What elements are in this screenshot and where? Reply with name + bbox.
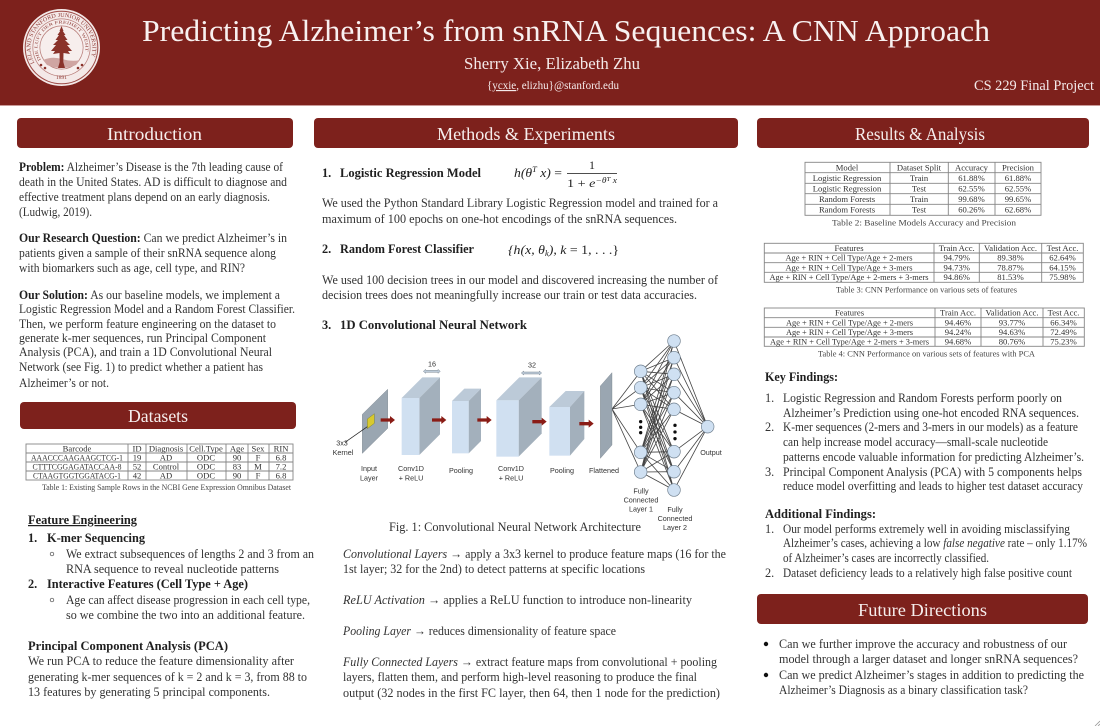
heading: methods: Methods & Experiments xyxy=(437,124,615,144)
text: PCA: We run PCA to reduce the feature dimensionality after xyxy=(28,654,294,668)
table 4: CNN performance with PCA: 66.34% xyxy=(1050,317,1077,327)
table 2: baseline models: 60.26% xyxy=(958,204,985,214)
text: PCA: Principal Component Analysis (PCA) xyxy=(28,639,228,653)
table 1: sample rows: AD xyxy=(160,452,172,462)
table 4: CNN performance with PCA: Features xyxy=(835,308,865,318)
heading: future directions xyxy=(757,594,1088,624)
table 4: CNN performance with PCA: 72.49% xyxy=(1050,327,1077,337)
text: key findings: Alzheimer’s Prediction using one-hot encoded RNA sequences. xyxy=(783,406,1079,420)
formula: random forest: = 1, . . .} xyxy=(570,242,619,257)
text: additional findings: Alzheimer’s cases, achieving a low false negative rate – only 1.17% xyxy=(783,536,1087,550)
table 4: CNN performance with PCA: 94.63% xyxy=(999,327,1025,337)
method 1: logistic regression: maximum of 100 epochs on one-hot encodings of the snRNA sequences. xyxy=(322,212,677,226)
heading: future directions: Future Directions xyxy=(858,600,987,620)
diagram labels: Conv1D xyxy=(398,464,424,473)
icon: Stanford seal xyxy=(23,9,100,86)
node: output xyxy=(701,420,714,433)
text: key findings: 2. xyxy=(765,420,774,434)
figure: CNN architecture diagram xyxy=(345,335,714,496)
heading: results: Results & Analysis xyxy=(855,124,985,144)
list: features: We extract subsequences of lengths 2 and 3 from an xyxy=(66,547,314,561)
heading: introduction xyxy=(17,118,293,148)
table 1: sample rows: 19 xyxy=(133,452,141,462)
table 4: CNN performance with PCA: 94.46% xyxy=(945,317,971,327)
arrows between layers xyxy=(381,416,594,428)
heading: methods xyxy=(314,118,738,148)
formula: logistic function: T xyxy=(606,177,611,183)
diagram labels: + ReLU xyxy=(399,474,423,482)
table 2: baseline models: Accuracy xyxy=(955,162,989,172)
table 2: baseline models: Train xyxy=(910,194,929,204)
table 1: sample rows: F xyxy=(256,452,261,462)
method 1: logistic regression: 1. xyxy=(322,166,331,180)
table 4: CNN performance with PCA: Age + RIN + Cell Type/Age + 2-mers + 3-mers xyxy=(770,336,930,346)
table 3: CNN performance: 64.15% xyxy=(1049,262,1076,272)
diagram labels: Pooling xyxy=(550,466,574,475)
table 4: CNN performance with PCA: 94.24% xyxy=(945,327,971,337)
formula: logistic function xyxy=(514,158,618,190)
method 2: random forest xyxy=(322,242,719,302)
table 1: sample rows: ODC xyxy=(197,452,215,462)
authors: Sherry Xie, Elizabeth Zhu xyxy=(464,54,640,73)
diagram labels: Conv1D xyxy=(498,464,524,473)
text: layer descriptions xyxy=(342,547,727,700)
layer width markers xyxy=(423,369,542,375)
panel: datasets xyxy=(20,402,314,699)
text: key findings: reduce model overfitting and leads to higher test dataset accuracy xyxy=(783,479,1084,493)
method 2: random forest: 2. xyxy=(322,242,331,256)
panel: future directions xyxy=(757,594,1088,697)
text: layer descriptions: output (32 nodes in the first FC layer, then 64, then 1 node for the prediction) xyxy=(343,686,720,700)
formula: logistic function: −θ xyxy=(595,176,607,185)
table 2: baseline models: Dataset Split xyxy=(897,162,942,172)
table 1: sample rows: 52 xyxy=(133,462,141,472)
diagram labels: Fully xyxy=(633,486,649,496)
table 1: sample rows: RIN xyxy=(274,444,289,454)
table 1: sample rows: CTAAGTGGTGGATACG-1 xyxy=(33,470,121,480)
text: key findings: 3. xyxy=(765,465,774,479)
table 1: sample rows: Barcode xyxy=(63,444,91,454)
table 3: CNN performance: 94.79% xyxy=(943,253,970,263)
text: additional findings: Additional Findings: xyxy=(765,507,876,521)
table 4: CNN performance with PCA: 80.76% xyxy=(999,336,1025,346)
table 4 caption: Table 4: CNN Performance on various sets of features with PCA xyxy=(818,350,1035,358)
table 1: sample rows: AAACCCAAGAAGCTCG-1 xyxy=(31,452,123,462)
table 1: sample rows: 90 xyxy=(233,452,241,462)
panel: results and analysis xyxy=(757,118,1089,580)
table 4: CNN performance with PCA: Age + RIN + Cell Type/Age + 2-mers xyxy=(786,317,914,327)
table 3: CNN performance: 81.53% xyxy=(997,272,1024,282)
table 1: sample rows: M xyxy=(254,462,262,472)
text: research question: patients given a sample of their snRNA sequence along xyxy=(19,246,276,260)
input layer xyxy=(345,389,388,453)
text: layer descriptions: 1st layer; 32 for the 2nd) to detect patterns at specific locations xyxy=(343,562,645,576)
method 1: logistic regression: Logistic Regression Model xyxy=(340,166,482,180)
text: future questions: Can we predict Alzheimer’s stages in addition to predicting the xyxy=(779,668,1085,682)
formula: logistic function: 1 + e xyxy=(567,176,595,190)
text: additional findings: of Alzheimer’s cases are incorrectly classified. xyxy=(783,551,989,565)
pooling layer 2 xyxy=(549,391,584,456)
panel: methods and experiments xyxy=(314,118,738,700)
table 4: CNN performance with PCA: 94.68% xyxy=(945,336,971,346)
network connections xyxy=(612,341,708,490)
text: key findings: Principal Component Analysis (PCA) with 5 components helps xyxy=(783,465,1082,479)
method 1: logistic regression: We used the Python Standard Library Logistic Regression model and trained for a xyxy=(322,196,719,210)
table 4: CNN performance with PCA: Age + RIN + Cell Type/Age + 3-mers xyxy=(786,327,914,337)
diagram labels: Connected xyxy=(658,514,692,523)
table 1: sample rows: 42 xyxy=(133,470,141,480)
text: future questions: Can we further improve the accuracy and robustness of our xyxy=(779,637,1067,651)
table 3: CNN performance: Features xyxy=(834,243,864,253)
text: solution: Our Solution: As our baseline models, we implement a xyxy=(19,288,281,302)
diagram labels: Kernel xyxy=(333,448,354,457)
table 1: sample rows: F xyxy=(256,470,261,480)
method 3 heading: CNN: 3. xyxy=(322,318,331,332)
text: problem: death in the United States. AD is difficult to diagnose and xyxy=(19,175,287,189)
formula: random forest: {h(x, θ xyxy=(508,242,543,257)
table 3: CNN performance: Age + RIN + Cell Type/Age + 2-mers xyxy=(786,253,913,263)
heading: introduction: Introduction xyxy=(107,124,202,144)
table 4: CNN performance with PCA: Validation Acc. xyxy=(986,308,1038,318)
text: PCA: 13 features by generating 5 principal components. xyxy=(28,685,270,699)
text: additional findings: 2. xyxy=(765,566,774,580)
formula: logistic function: h(θ xyxy=(514,165,531,180)
text: PCA: generating k-mer sequences of k = 2 and k = 3, from 88 to xyxy=(28,670,307,684)
table 1: sample rows: 6.8 xyxy=(276,470,286,480)
text: key findings: can help increase model accuracy—small-scale nucleotide xyxy=(783,435,1048,449)
table 2: baseline models: 61.88% xyxy=(958,173,985,183)
diagram labels: 16 xyxy=(428,360,436,368)
table 4: CNN performance with PCA: Test Acc. xyxy=(1048,308,1079,318)
table 2: baseline models: Logistic Regression xyxy=(813,173,882,183)
table 3: CNN performance: 75.98% xyxy=(1049,272,1076,282)
text: additional findings: Dataset deficiency leads to a relatively high false positive count xyxy=(783,566,1073,580)
list: features: Age can affect disease progression in each cell type, xyxy=(66,593,310,607)
table 1: sample rows: 6.8 xyxy=(276,452,286,462)
diagram labels: Layer xyxy=(360,474,379,482)
table 2: baseline models: 62.68% xyxy=(1005,204,1031,214)
method 2: random forest: decision trees does not meaningfully increase our train or test data accuracies. xyxy=(322,288,697,302)
formula: random forest: ), k xyxy=(548,242,570,257)
diagram labels: Layer 2 xyxy=(663,523,687,532)
title: Predicting Alzheimer’s from snRNA Sequences: A CNN Approach xyxy=(142,13,991,48)
table 1: sample rows: Age xyxy=(230,444,244,454)
table 1: sample rows: Cell.Type xyxy=(189,444,223,454)
text: research question: Our Research Question: Can we predict Alzheimer’s in xyxy=(19,231,287,245)
text: solution: Analysis (PCA), and train a 1D Convolutional Neural xyxy=(19,345,273,359)
table 4: CNN performance with PCA: 75.23% xyxy=(1050,336,1077,346)
table 2: baseline models: 62.55% xyxy=(958,184,985,194)
nodes: layer 2 xyxy=(668,335,680,496)
text: problem: (Ludwig, 2019). xyxy=(19,205,92,219)
table 3: CNN performance: Age + RIN + Cell Type/Age + 3-mers xyxy=(786,262,913,272)
diagram labels: Pooling xyxy=(449,466,473,475)
table 4: CNN performance with PCA: Train Acc. xyxy=(940,308,976,318)
text: solution: Then, we perform feature engineering on the dataset to xyxy=(19,317,276,331)
text: solution: Alzheimer’s or not. xyxy=(19,376,109,390)
diagram labels xyxy=(333,360,722,532)
header banner xyxy=(0,0,1100,106)
table 1: sample rows xyxy=(26,444,293,480)
text: problem xyxy=(19,160,287,219)
text: layer descriptions: ReLU Activation → applies a ReLU function to introduce non-linearity xyxy=(342,593,693,607)
icon: Stanford seal: DIE LUFT DER FREIHEIT WEHT xyxy=(34,20,88,62)
formula: random forest: k xyxy=(545,249,549,258)
table 1 caption: Table 1: Existing Sample Rows in the NCBI Gene Expression Omnibus Dataset xyxy=(42,483,292,492)
table 1: sample rows: CTTTCGGAGATACCAA-8 xyxy=(32,462,122,472)
table 1: sample rows: 83 xyxy=(233,462,241,472)
text: PCA xyxy=(28,639,307,699)
diagram labels: Input xyxy=(361,464,377,473)
list: features: 1. xyxy=(28,531,37,545)
text: additional findings xyxy=(765,507,1087,580)
table 1: sample rows: 7.2 xyxy=(276,462,286,472)
heading: results xyxy=(757,118,1089,148)
text: key findings: Key Findings: xyxy=(765,370,838,384)
list: features: so we combine the two into an additional feature. xyxy=(66,608,305,622)
table 2: baseline models: Train xyxy=(910,173,929,183)
text: layer descriptions: layers, flatten them, and perform high-level reasoning to produce the final xyxy=(343,670,698,684)
text: future questions: Alzheimer’s Diagnosis as a binary classification task? xyxy=(779,683,1028,697)
diagram labels: Flattened xyxy=(589,466,619,475)
table 3: CNN performance: 89.38% xyxy=(997,253,1024,263)
method 2: random forest: We used 100 decision trees in our model and discovered increasing the number of xyxy=(322,273,719,287)
text: key findings: Logistic Regression and Random Forests perform poorly on xyxy=(783,391,1062,405)
table 2: baseline models: Random Forests xyxy=(819,204,876,214)
table 2: baseline models: 61.88% xyxy=(1005,173,1031,183)
text: solution: Network (see Fig. 1) to predict whether a patient has xyxy=(19,360,263,374)
table 1: sample rows: Control xyxy=(153,462,180,472)
method 1: logistic regression xyxy=(322,158,719,226)
table 3: CNN performance: 94.73% xyxy=(943,262,970,272)
text: problem: effective treatment plans depend on an early diagnosis. xyxy=(19,190,270,204)
list: features: K-mer Sequencing xyxy=(47,531,146,545)
figure caption: Fig. 1: Convolutional Neural Network Architecture xyxy=(389,520,642,534)
list: features: Interactive Features (Cell Type + Age) xyxy=(47,577,248,591)
formula: logistic function: T xyxy=(532,165,537,174)
table 4: CNN performance with PCA: 93.77% xyxy=(999,317,1025,327)
table 2 caption: Table 2: Baseline Models Accuracy and Precision xyxy=(832,218,1017,228)
panel: introduction xyxy=(17,118,295,390)
table 2: baseline models: 62.55% xyxy=(1005,184,1031,194)
table 2: baseline models: Random Forests xyxy=(819,194,876,204)
course label: CS 229 Final Project xyxy=(974,78,1094,94)
diagram labels: Fully xyxy=(667,505,683,514)
flattened layer xyxy=(600,373,612,458)
table 2: baseline models: Precision xyxy=(1002,162,1035,172)
diagram labels: + ReLU xyxy=(499,474,523,482)
ellipsis dots xyxy=(639,420,677,440)
list: features: RNA sequence to reveal nucleotide patterns xyxy=(66,562,279,576)
icon: Stanford seal: 1891 xyxy=(56,75,67,81)
formula: logistic function: = xyxy=(554,165,562,180)
table 3: CNN performance: 62.64% xyxy=(1049,253,1076,263)
table 1: sample rows: ODC xyxy=(197,470,215,480)
table 3: CNN performance: Train Acc. xyxy=(939,243,975,253)
table 2: baseline models: Test xyxy=(912,184,927,194)
text: additional findings: 1. xyxy=(765,522,774,536)
text: key findings: K-mer sequences (2-mers and 3-mers in our models) as a feature xyxy=(783,420,1078,434)
diagram labels: 32 xyxy=(528,360,536,370)
text: layer descriptions: Fully Connected Layers → extract feature maps from convolutional + pooling xyxy=(342,655,717,669)
table 1: sample rows: Diagnosis xyxy=(149,444,184,454)
conv layer 2 xyxy=(496,377,542,457)
table 4: CNN performance with PCA xyxy=(764,308,1084,346)
text: solution xyxy=(19,288,295,390)
table 1: sample rows: 90 xyxy=(233,470,241,480)
table 3: CNN performance xyxy=(764,243,1083,282)
list: features xyxy=(28,531,314,622)
text: layer descriptions: Pooling Layer → reduces dimensionality of feature space xyxy=(342,624,617,638)
pooling layer 1 xyxy=(452,389,481,453)
text: solution: Logistic Regression Model and a Random Forest Classifier. xyxy=(19,302,295,316)
table 3: CNN performance: 94.86% xyxy=(943,272,970,282)
text: additional findings: Our model performs extremely well in avoiding misclassifying xyxy=(783,522,1070,536)
method 2: random forest: Random Forest Classifier xyxy=(340,242,475,256)
formula: logistic function: 1 xyxy=(589,158,595,172)
table 2: baseline models: Test xyxy=(912,204,927,214)
table 3: CNN performance: 78.87% xyxy=(997,262,1024,272)
table 2: baseline models: Model xyxy=(836,162,859,172)
text: key findings: 1. xyxy=(765,391,774,405)
table 3: CNN performance: Age + RIN + Cell Type/Age + 2-mers + 3-mers xyxy=(770,272,929,282)
diagram labels: Connected xyxy=(624,496,658,504)
list: features: 2. xyxy=(28,577,37,591)
text: future questions xyxy=(764,637,1085,697)
text: key findings xyxy=(765,370,1084,493)
text: problem: Problem: Alzheimer’s Disease is the 7th leading cause of xyxy=(19,160,284,174)
diagram labels: Output xyxy=(700,448,722,457)
heading: feature engineering: Feature Engineering xyxy=(28,513,138,527)
text: solution: generate k-mer sequences, run Principal Component xyxy=(19,331,267,345)
diagram labels: 3x3 xyxy=(336,438,348,448)
heading: datasets xyxy=(20,402,296,429)
table 3 caption: Table 3: CNN Performance on various sets of features xyxy=(836,286,1017,294)
text: key findings: patterns encode valuable information for predicting Alzheimer’s. xyxy=(783,450,1084,464)
table 2: baseline models: 99.65% xyxy=(1005,194,1031,204)
text: future questions: model through a larger dataset and longer snRNA sequences? xyxy=(779,652,1078,666)
method 3 heading: CNN: 1D Convolutional Neural Network xyxy=(340,318,527,332)
heading: datasets: Datasets xyxy=(128,406,188,426)
text: research question xyxy=(19,231,287,275)
formula: logistic function: x) xyxy=(537,165,554,180)
diagram labels: Layer 1 xyxy=(629,504,653,514)
text: research question: with biomarkers such as age, cell type, and RIN? xyxy=(19,261,245,275)
table 3: CNN performance: Validation Acc. xyxy=(984,243,1037,253)
table 2: baseline models xyxy=(805,162,1041,215)
table 1: sample rows: Sex xyxy=(252,444,265,454)
text: layer descriptions: Convolutional Layers → apply a 3x3 kernel to produce feature maps (16 for the xyxy=(343,547,727,561)
table 1: sample rows: ODC xyxy=(197,462,215,472)
table 1: sample rows: ID xyxy=(132,444,142,454)
conv layer 1 xyxy=(402,377,440,455)
table 3: CNN performance: Test Acc. xyxy=(1047,243,1078,253)
table 1: sample rows: AD xyxy=(160,470,172,480)
formula: logistic function: x xyxy=(610,176,618,185)
table 2: baseline models: 99.68% xyxy=(958,194,985,204)
icon: Stanford seal: LELAND STANFORD JUNIOR UNIVERSITY xyxy=(26,13,96,65)
nodes: layer 1 xyxy=(634,365,647,478)
table 2: baseline models: Logistic Regression xyxy=(813,184,882,194)
emails: {ycxie, elizhu}@stanford.edu xyxy=(487,80,619,92)
